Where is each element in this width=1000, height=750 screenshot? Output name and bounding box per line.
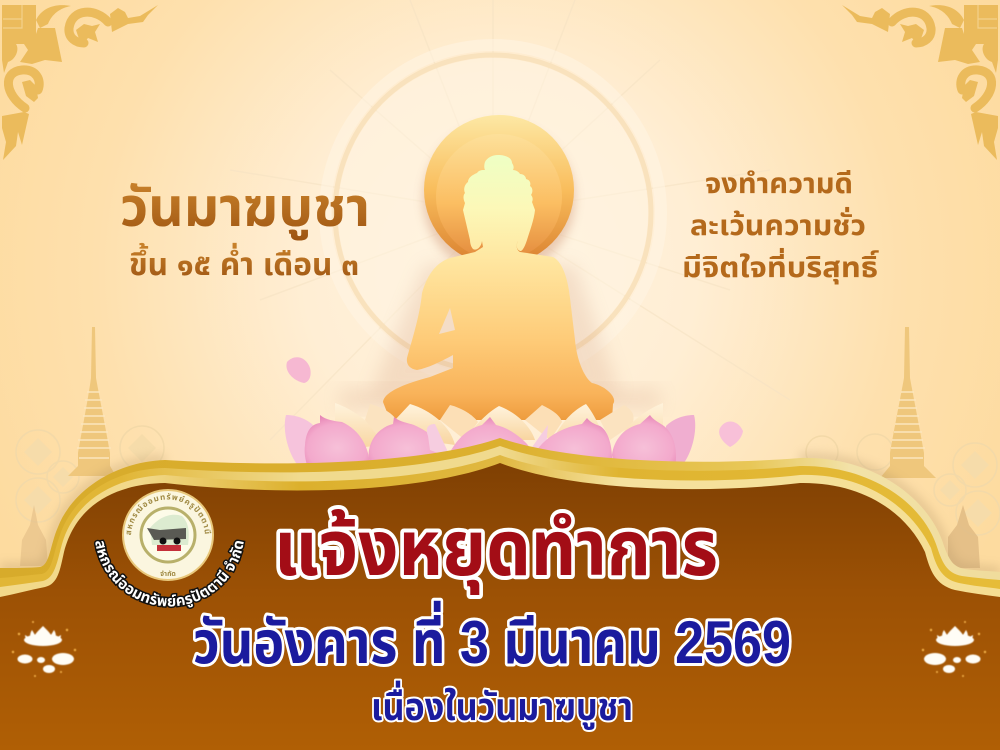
Buddha silhouette <box>383 155 614 420</box>
co-op name on arc: สหกรณ์ออมทรัพย์ครูปัตตานี จำกัด <box>94 539 246 609</box>
brown panel <box>0 463 1000 750</box>
rays behind the Buddha <box>230 0 790 440</box>
back petals <box>335 403 663 450</box>
pagoda and pattern: right <box>806 327 1000 568</box>
pink buds <box>285 415 314 468</box>
pagoda and pattern: left <box>16 327 164 566</box>
white lotus: left <box>12 621 76 677</box>
white lotus: right <box>922 621 986 677</box>
Buddha and lotus shadow <box>340 123 660 410</box>
title: วันมาฆบูชา: วันมาฆบูชา <box>120 178 370 240</box>
dharma text <box>682 168 880 284</box>
floating petal: right <box>719 422 743 447</box>
halo ring <box>325 45 661 381</box>
floating petal: left <box>286 357 311 383</box>
inner halo <box>436 134 562 260</box>
wave top shadow <box>0 458 1000 572</box>
co-op emblem: จำกัด <box>160 570 176 578</box>
outer halo <box>424 115 574 265</box>
reason line: เนื่องในวันมาฆบูชา: เนื่องในวันมาฆบูชา <box>371 680 633 730</box>
date line: วันอังคาร ที่ 3 มีนาคม 2569: วันอังคาร ที่ 3 มีนาคม 2569 <box>193 600 791 676</box>
lotus base <box>285 403 695 470</box>
date: ขึ้น ๑๕ ค่ำ เดือน ๓: ขึ้น ๑๕ ค่ำ เดือน ๓ <box>129 242 359 282</box>
co-op emblem: สหกรณ์ออมทรัพย์ครูปัตตานี <box>126 493 212 535</box>
headline: แจ้งหยุดทำการ: แจ้งหยุดทำการ <box>274 506 718 595</box>
dharma text: มีจิตใจที่บริสุทธิ์ <box>682 247 880 284</box>
dharma text: จงทำความดี <box>705 168 853 199</box>
corner ornament: top left <box>2 5 158 160</box>
co-op emblem <box>122 489 214 581</box>
dharma text: ละเว้นความชั่ว <box>690 206 866 241</box>
corner ornament: top right <box>842 5 998 160</box>
gold wave frame <box>0 438 1000 620</box>
